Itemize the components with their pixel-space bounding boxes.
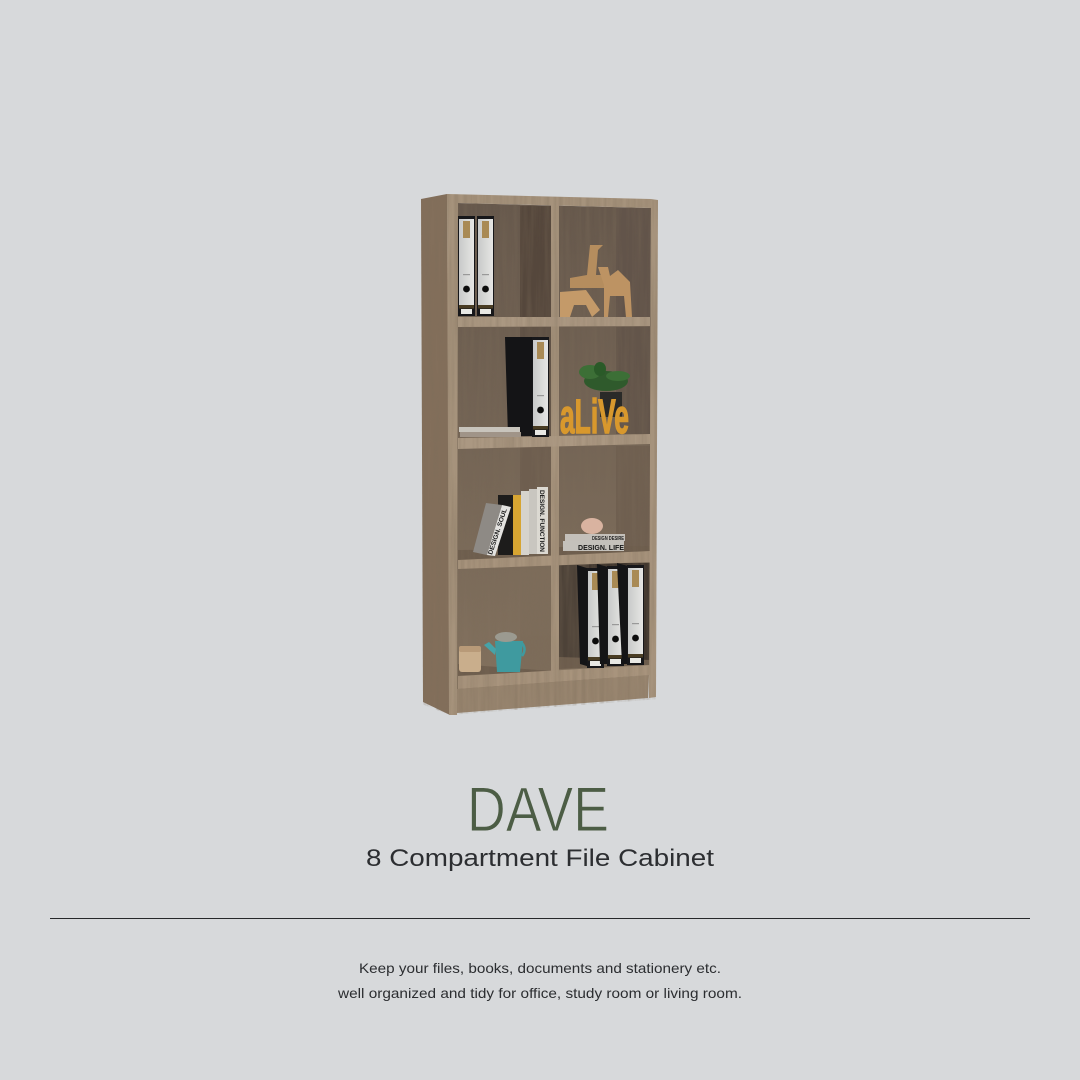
shelf floors: [458, 546, 650, 677]
books third row: DESIGN. SOUL: [487, 508, 509, 556]
plant: [579, 362, 630, 417]
left column inner shadows: [520, 206, 551, 671]
product photo: bookcase: [421, 194, 658, 715]
description text: [337, 960, 742, 1001]
description text: Keep your files, books, documents and stationery etc.: [359, 960, 721, 976]
black binder: [505, 337, 549, 437]
binders top left: [458, 216, 494, 316]
books third row: DESIGN. FUNCTION: [538, 490, 545, 552]
infographic canvas: [50, 194, 1030, 1001]
teal watering can: [484, 632, 524, 672]
back wall of compartments: [457, 203, 651, 690]
front frame: [447, 194, 658, 715]
right column inner shadows: [559, 208, 650, 665]
divider line: [50, 918, 1030, 919]
books third row: [473, 487, 548, 556]
cabinet side panel: [421, 194, 450, 715]
title: DAVE: DAVE: [467, 775, 609, 845]
cream jar: [459, 646, 481, 672]
vase and design books: DESIGN. LIFE: [578, 543, 624, 552]
vase and design books: DESIGN DESIRE: [592, 536, 624, 542]
description text: well organized and tidy for office, study room or living room.: [337, 985, 742, 1001]
binders bottom right: [577, 563, 644, 668]
wooden animal figures: [560, 245, 632, 317]
stacked books second row: [459, 427, 521, 437]
vase and design books: [563, 518, 625, 552]
wood grain texture: [421, 194, 658, 715]
subtitle: 8 Compartment File Cabinet: [366, 845, 714, 872]
alive sculpture: aLiVe: [560, 391, 629, 444]
